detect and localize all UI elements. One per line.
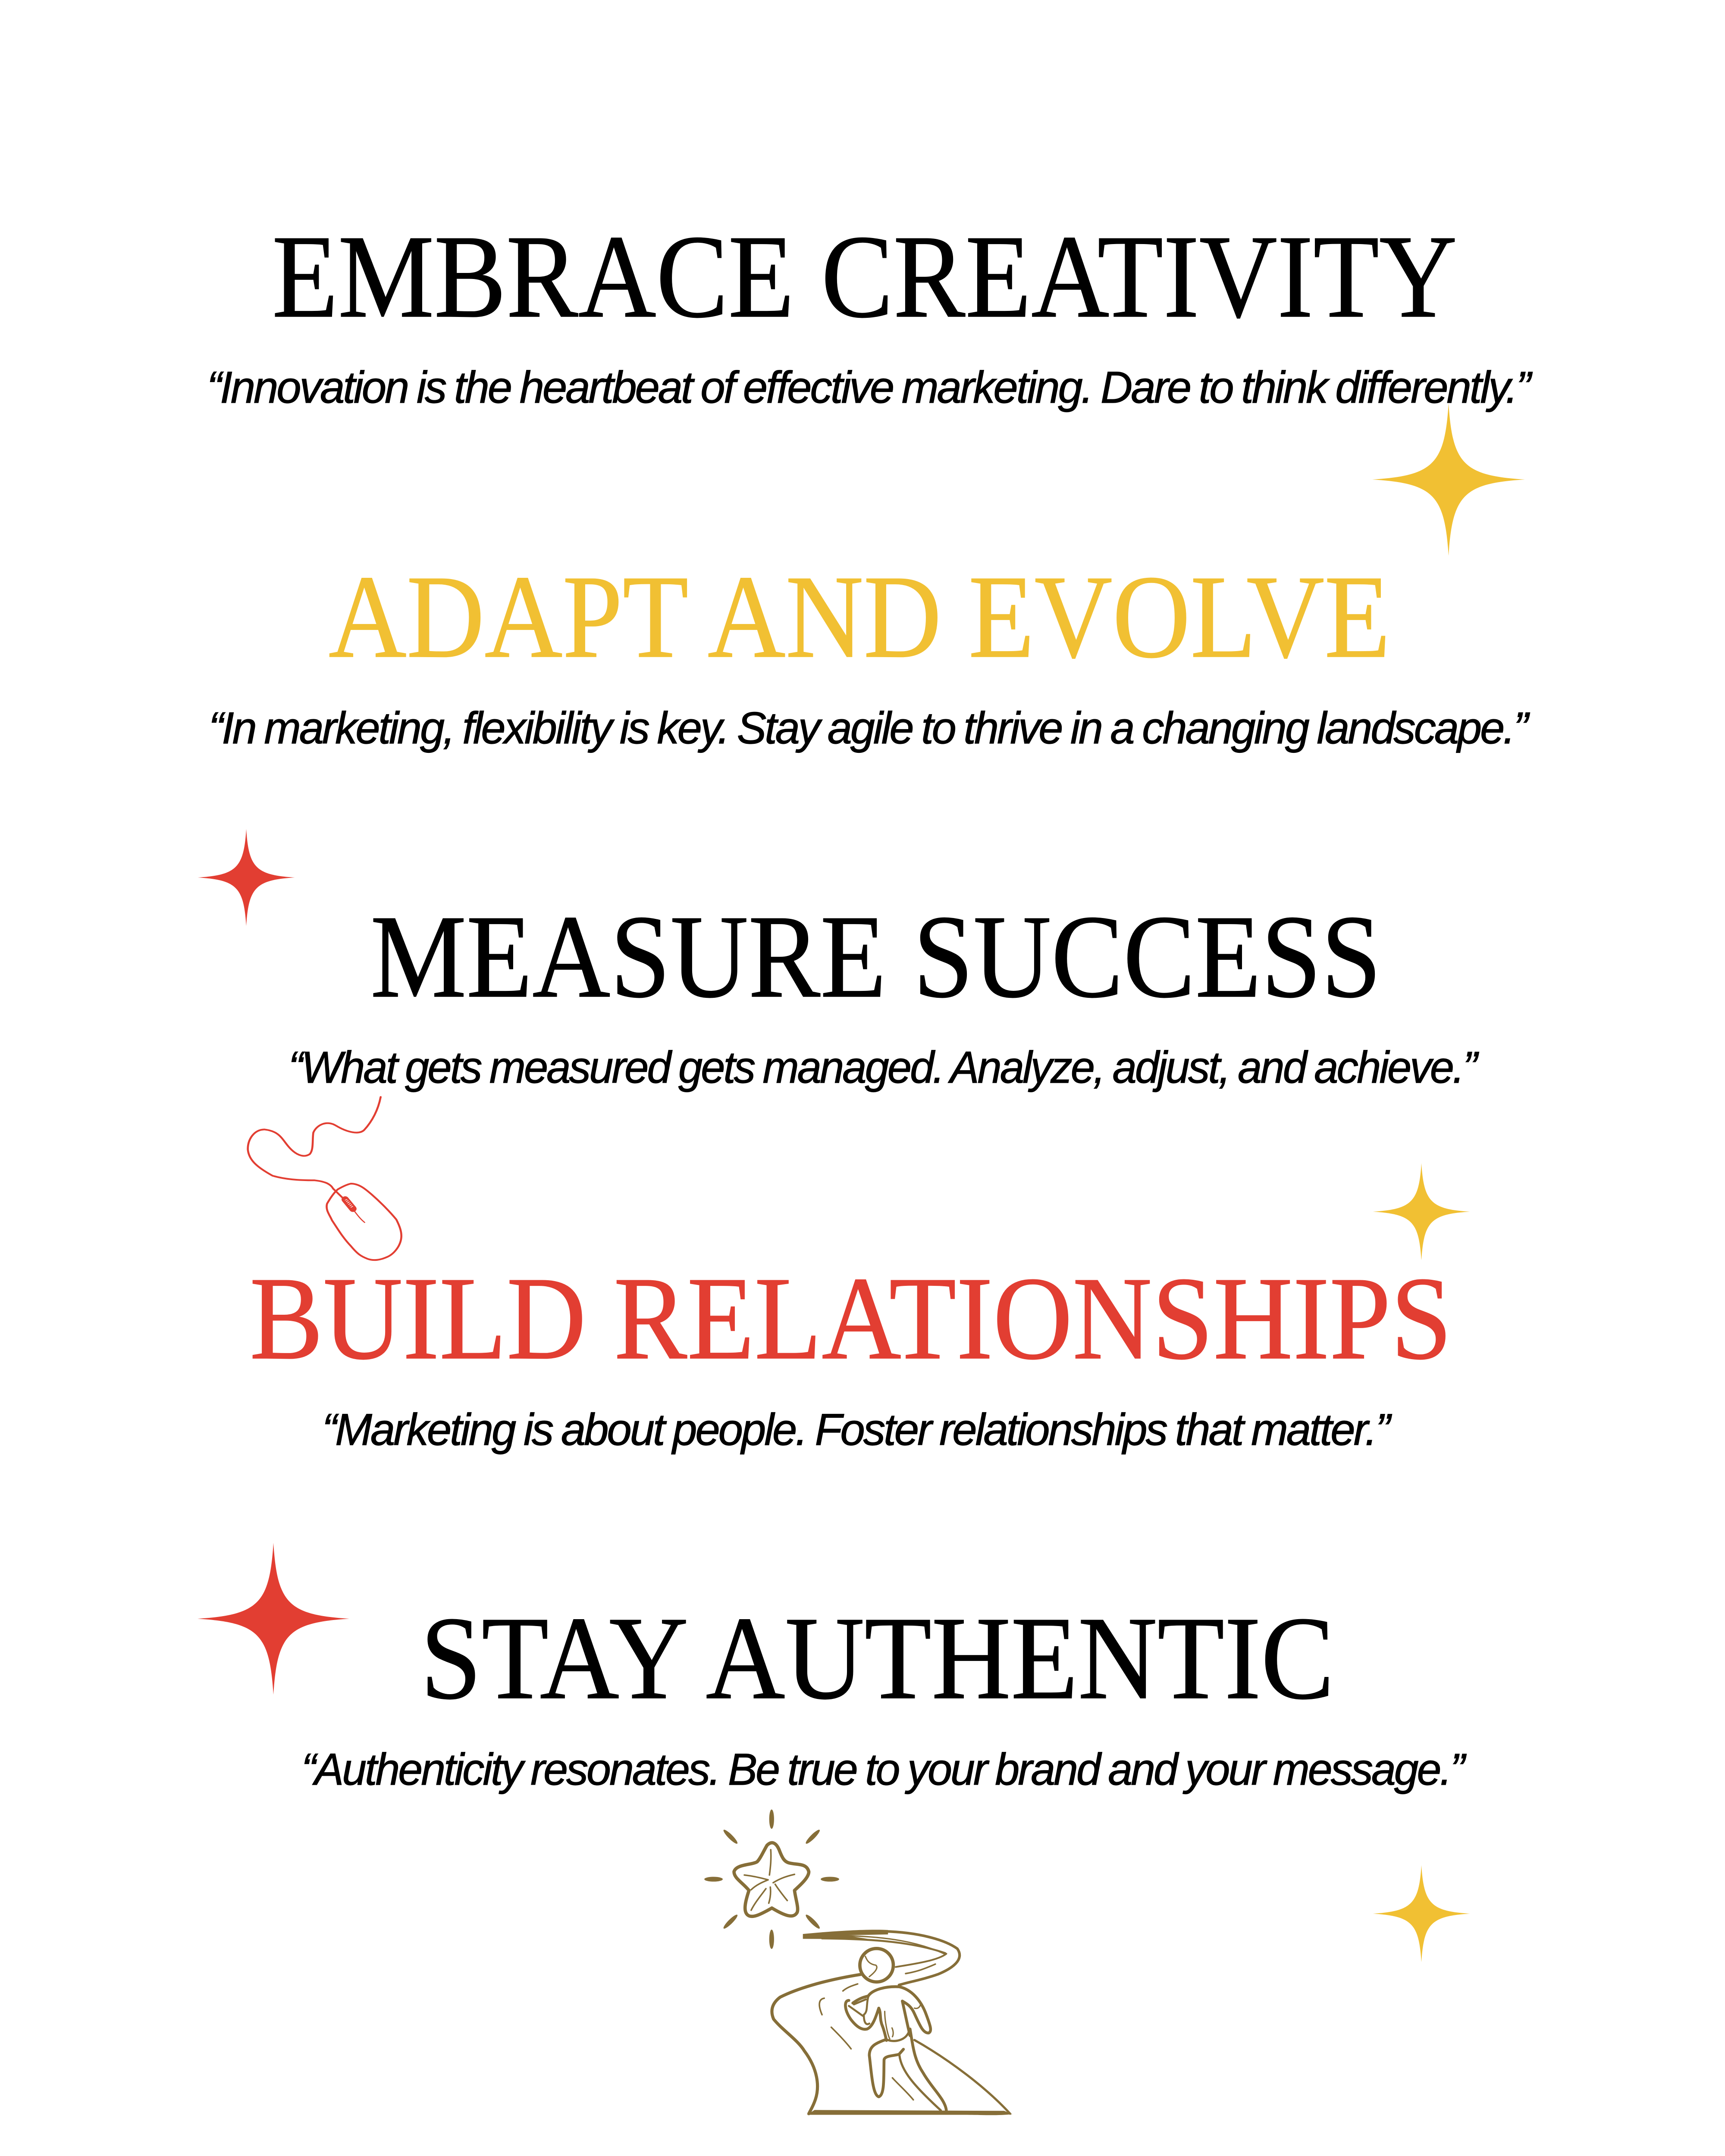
- icon: computer mouse with cord: [248, 1097, 401, 1260]
- icon: large red sparkle: [198, 1543, 349, 1695]
- heading: Measure Success: MEASURE SUCCESS: [370, 890, 1381, 1022]
- heading: Build Relationships: BUILD RELATIONSHIPS: [250, 1252, 1452, 1384]
- icon: small gold sparkle lower right: [1373, 1865, 1470, 1962]
- heading: Adapt and Evolve: ADAPT AND EVOLVE: [329, 551, 1390, 683]
- quote: authenticity: “Authenticity resonates. Be true to your brand and your message.”: [301, 1745, 1467, 1795]
- heading: Stay Authentic: STAY AUTHENTIC: [420, 1592, 1334, 1724]
- quote: measurement: “What gets measured gets managed. Analyze, adjust, and achieve.”: [289, 1043, 1479, 1093]
- quote: people: “Marketing is about people. Foster relationships that matter.”: [322, 1405, 1392, 1455]
- icon: runner on a road reaching for a star: [704, 1809, 1012, 2115]
- quote: innovation: “Innovation is the heartbeat of effective marketing. Dare to think differently.”: [207, 363, 1533, 413]
- quote: flexibility: “In marketing, flexibility is key. Stay agile to thrive in a changing landscape.”: [209, 703, 1530, 753]
- winding road: [772, 1930, 1012, 2115]
- icon: small gold sparkle: [1373, 1163, 1470, 1260]
- icon: large gold sparkle: [1372, 403, 1525, 556]
- icon: small red sparkle: [198, 829, 295, 926]
- heading: Embrace Creativity: EMBRACE CREATIVITY: [272, 210, 1457, 342]
- runner figure: [845, 1949, 946, 2110]
- star outline with rays: [704, 1809, 839, 1949]
